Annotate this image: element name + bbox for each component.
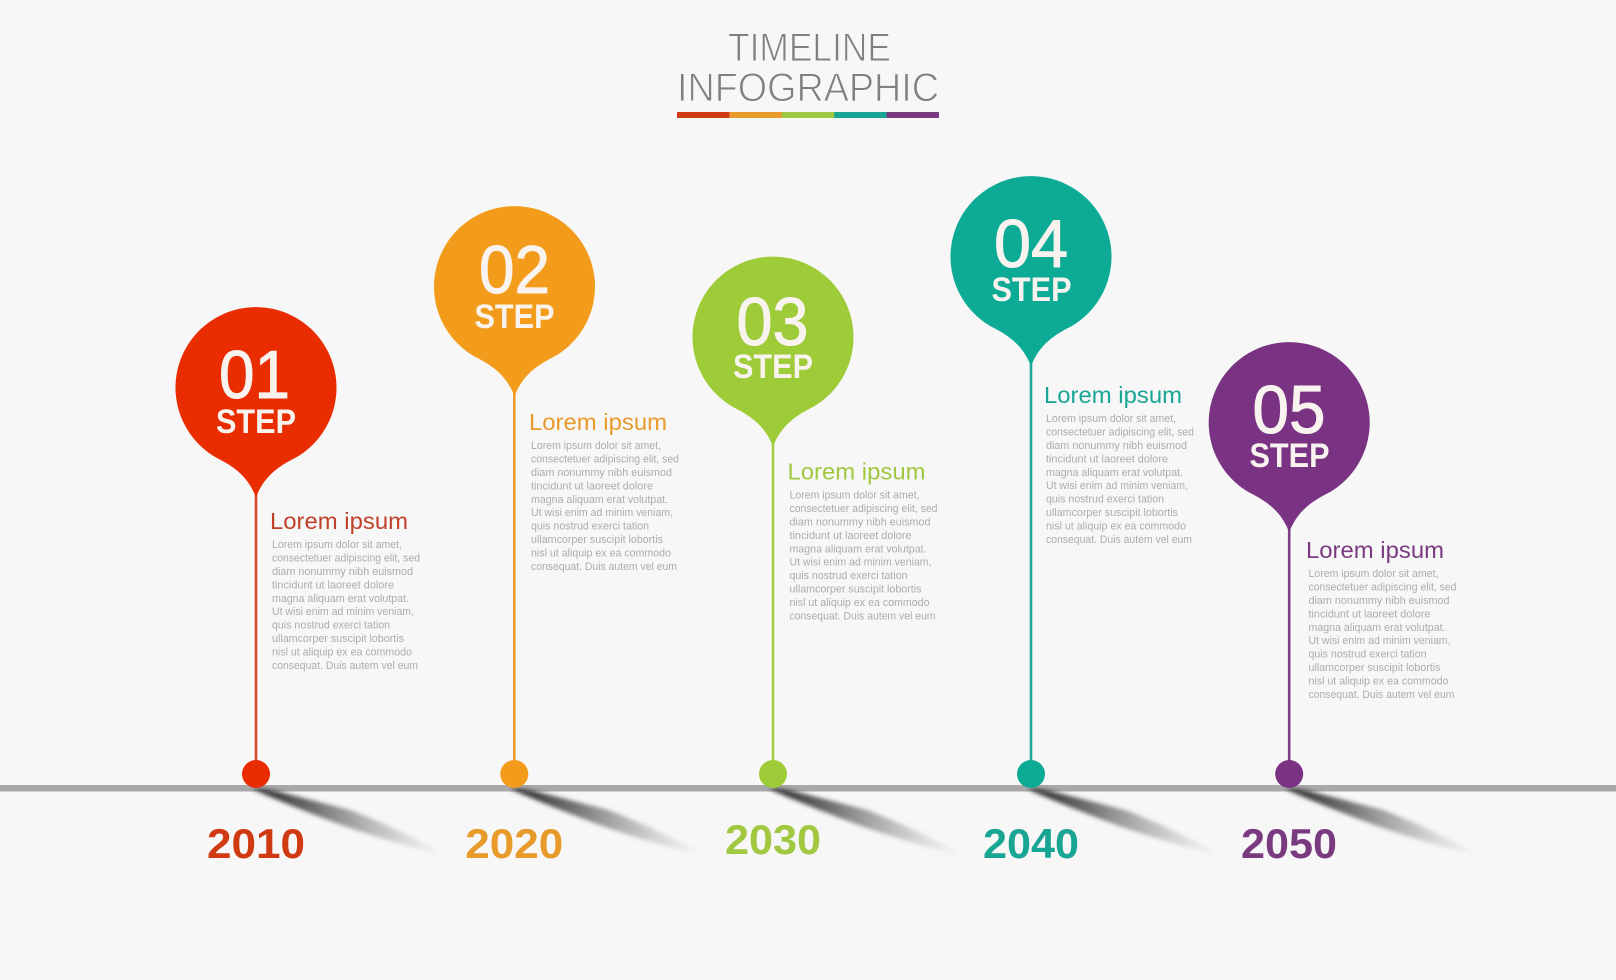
step 01 pin [176, 307, 336, 788]
step 01 body text: Lorem ipsum dolor sit amet, [272, 539, 402, 551]
step 03 year: 2030 [725, 816, 821, 863]
step 05 year: 2050 [1241, 820, 1337, 867]
step 05 body text: consequat. Duis autem vel eum [1308, 689, 1454, 701]
step 05 pin [1209, 342, 1370, 788]
step 05 body text: diam nonummy nibh euismod [1308, 595, 1450, 607]
step 04 pin: STEP [992, 271, 1072, 309]
step 05 body text: Lorem ipsum dolor sit amet, [1308, 568, 1438, 580]
step 05 body text: quis nostrud exerci tation [1308, 649, 1426, 661]
step 02 body text: nisl ut aliquip ex ea commodo [531, 548, 671, 560]
step 04 year: 2040 [983, 820, 1079, 867]
shadow 2030 [769, 789, 969, 858]
step 02 body text: consectetuer adipiscing elit, sed [531, 453, 679, 465]
step 03 pin: 03 [736, 284, 808, 360]
step 01 pin: 01 [219, 337, 290, 413]
step 01 body text: magna aliquam erat volutpat. [272, 593, 409, 605]
step 02 heading: Lorem ipsum [529, 409, 667, 435]
step 02 body text: Lorem ipsum dolor sit amet, [531, 440, 661, 452]
step 03 body text: Lorem ipsum dolor sit amet, [790, 490, 920, 502]
step 03 body text [790, 490, 938, 622]
step 02 body text: tincidunt ut laoreet dolore [531, 480, 653, 492]
step 01 body text: quis nostrud exerci tation [272, 620, 390, 632]
step 03 body text: Ut wisi enim ad minim veniam, [790, 557, 932, 569]
step 03 pin: STEP [733, 348, 813, 386]
step 05 pin: STEP [1250, 437, 1330, 475]
step 02 body text: magna aliquam erat volutpat. [531, 494, 668, 506]
step 02 pin [434, 206, 595, 788]
step 03 body text: magna aliquam erat volutpat. [790, 543, 926, 555]
step 01 body text: nisl ut aliquip ex ea commodo [272, 646, 412, 658]
step 01 body text: consectetuer adipiscing elit, sed [272, 552, 420, 564]
shadow 2020 [510, 789, 710, 858]
step 03 body text: tincidunt ut laoreet dolore [790, 530, 912, 542]
step 05 body text: consectetuer adipiscing elit, sed [1308, 581, 1456, 593]
step 04 body text: Ut wisi enim ad minim veniam, [1046, 480, 1188, 492]
step 03 body text: diam nonummy nibh euismod [790, 516, 930, 528]
step 05 body text: ullamcorper suscipit lobortis [1308, 662, 1441, 674]
step 02 body text [531, 440, 679, 573]
title [677, 26, 939, 110]
step 02 pin: STEP [474, 298, 554, 336]
step 04 body text: nisl ut aliquip ex ea commodo [1046, 520, 1186, 532]
step 04 body text: quis nostrud exerci tation [1046, 494, 1164, 506]
shadow 2040 [1027, 789, 1227, 858]
step 02 pin: 02 [479, 232, 550, 308]
title: TIMELINE [728, 26, 891, 70]
step 01 heading: Lorem ipsum [270, 508, 408, 534]
step 01 body text: consequat. Duis autem vel eum [272, 660, 418, 672]
timeline ground line [0, 785, 1616, 792]
step 04 body text: diam nonummy nibh euismod [1046, 440, 1187, 452]
step 01 body text: tincidunt ut laoreet dolore [272, 579, 394, 591]
step 02 body text: Ut wisi enim ad minim veniam, [531, 507, 673, 519]
step 02 body text: ullamcorper suscipit lobortis [531, 534, 663, 546]
step 01 year: 2010 [207, 820, 305, 867]
step 01 pin: STEP [216, 403, 296, 441]
step 05 body text: nisl ut aliquip ex ea commodo [1308, 676, 1448, 688]
step 01 body text [272, 539, 420, 672]
step 05 body text: tincidunt ut laoreet dolore [1308, 608, 1430, 620]
step 01 body text: ullamcorper suscipit lobortis [272, 633, 404, 645]
title: INFOGRAPHIC [677, 66, 939, 110]
step 02 body text: quis nostrud exerci tation [531, 521, 649, 533]
step 01 body text: Ut wisi enim ad minim veniam, [272, 606, 414, 618]
shadow 2050 [1285, 789, 1485, 858]
step 04 pin: 04 [994, 206, 1068, 282]
step 05 pin: 05 [1252, 372, 1326, 448]
step 04 body text [1046, 413, 1194, 546]
step 04 body text: consequat. Duis autem vel eum [1046, 534, 1192, 546]
step 02 body text: consequat. Duis autem vel eum [531, 561, 677, 573]
step 04 body text: tincidunt ut laoreet dolore [1046, 453, 1168, 465]
step 03 pin [692, 257, 854, 788]
step 04 pin [950, 176, 1112, 788]
step 03 body text: consectetuer adipiscing elit, sed [790, 503, 938, 515]
step 05 body text: magna aliquam erat volutpat. [1308, 622, 1446, 634]
step 03 body text: quis nostrud exerci tation [790, 570, 908, 582]
step 02 year: 2020 [465, 820, 563, 867]
step 05 body text [1308, 568, 1456, 701]
step 04 body text: Lorem ipsum dolor sit amet, [1046, 413, 1176, 425]
step 04 body text: ullamcorper suscipit lobortis [1046, 507, 1178, 519]
step 03 body text: consequat. Duis autem vel eum [790, 610, 936, 622]
step 04 heading: Lorem ipsum [1044, 382, 1182, 408]
step 01 body text: diam nonummy nibh euismod [272, 566, 413, 578]
step 03 body text: nisl ut aliquip ex ea commodo [790, 597, 930, 609]
step 04 body text: magna aliquam erat volutpat. [1046, 467, 1183, 479]
step 05 heading: Lorem ipsum [1306, 537, 1444, 563]
shadow 2010 [252, 789, 452, 858]
title rainbow bar [677, 112, 939, 118]
step 02 body text: diam nonummy nibh euismod [531, 467, 672, 479]
step 05 body text: Ut wisi enim ad minim veniam, [1308, 635, 1450, 647]
step 04 body text: consectetuer adipiscing elit, sed [1046, 426, 1194, 438]
step 03 heading: Lorem ipsum [788, 458, 926, 484]
step 03 body text: ullamcorper suscipit lobortis [790, 584, 922, 596]
